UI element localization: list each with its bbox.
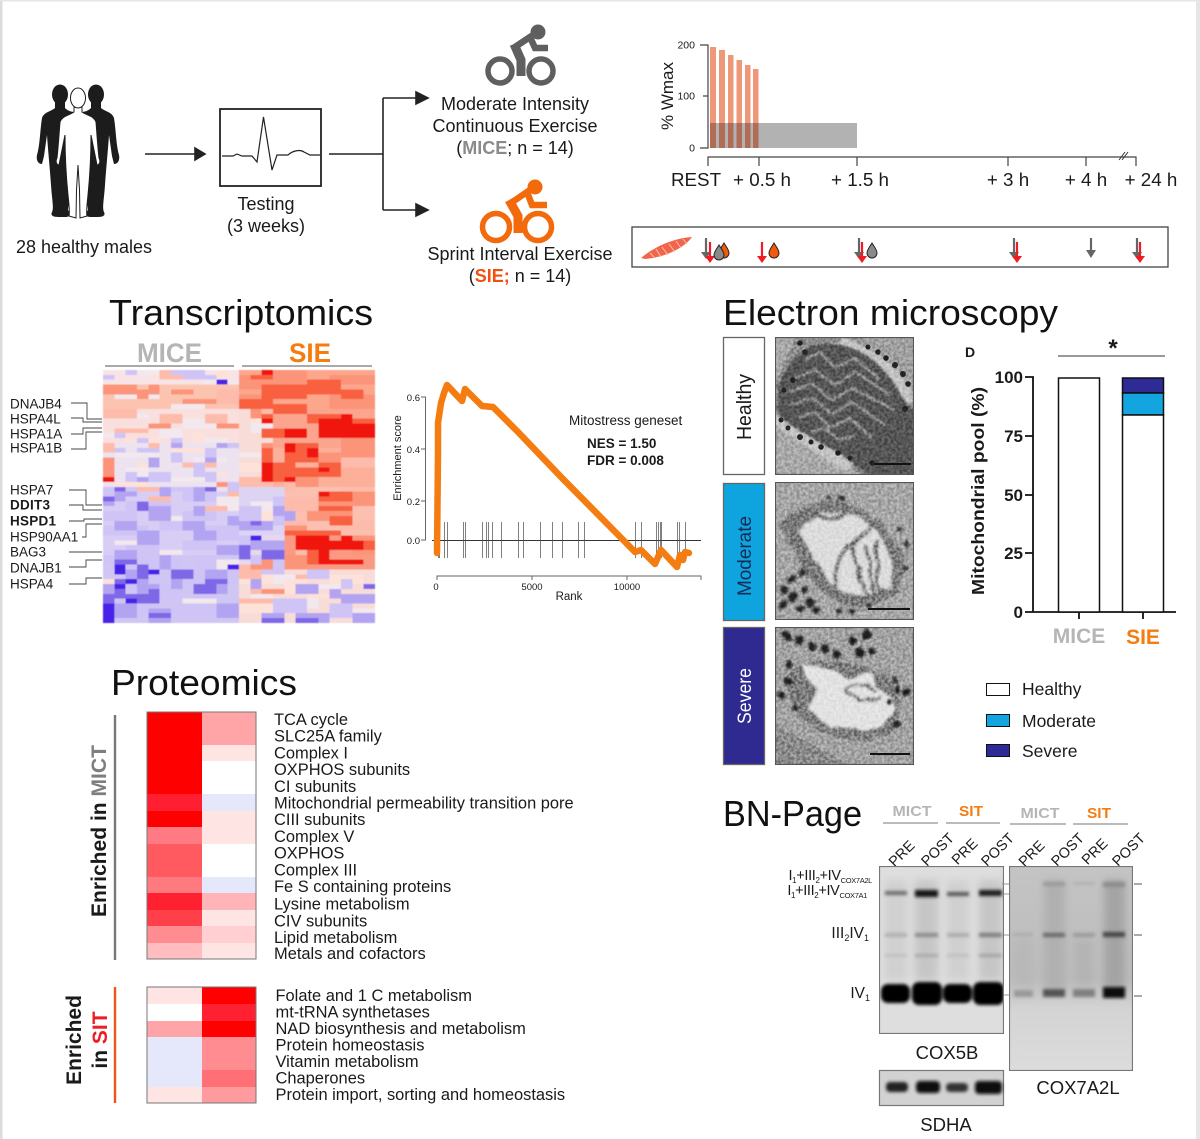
time axis: [708, 152, 1136, 166]
complex labels: III: [831, 925, 844, 942]
pathway labels: Lipid metabolism: [274, 929, 397, 947]
x labels: [1053, 625, 1160, 649]
pathway labels: CIII subunits: [274, 811, 365, 829]
labels: gene names: HSPA1B: [10, 440, 62, 456]
complex labels: 1: [791, 891, 796, 900]
pathway labels: Complex V: [274, 828, 354, 846]
icon: healthy male silhouettes: [37, 84, 119, 218]
pathway labels: Chaperones: [276, 1070, 365, 1088]
heatmap: [147, 987, 256, 1103]
side label: Enriched: [63, 995, 86, 1085]
x axis: Rank: [556, 591, 583, 603]
y axis title: % Wmax: [658, 62, 677, 130]
y axis title: Mitochondrial pool (%): [968, 387, 988, 595]
labels: gene names: [10, 396, 78, 592]
y axis: 0: [1014, 603, 1023, 622]
pathway labels: Complex I: [274, 744, 348, 762]
icon: grey cyclist: [488, 24, 553, 83]
complex labels: I: [788, 868, 792, 884]
significance bracket: *: [1108, 335, 1118, 362]
time labels: REST: [671, 169, 722, 190]
pathway labels: Fe S containing proteins: [274, 878, 451, 896]
panel: study design: [16, 24, 613, 286]
text: SIE description: (SIE; n = 14): [469, 266, 571, 286]
image: severe damage mitochondrion: [775, 627, 914, 765]
icon: orange cyclist: [482, 180, 552, 240]
pathway labels: CI subunits: [274, 778, 356, 796]
panel: BN-Page blots: [787, 803, 1149, 1135]
text: 28 healthy males: 28 healthy males: [16, 237, 152, 257]
lane labels: [886, 830, 1149, 870]
y axis: 75: [1004, 427, 1023, 446]
time labels: + 1.5 h: [831, 169, 889, 190]
lane labels: POST: [1049, 830, 1088, 870]
legend: [986, 679, 1096, 761]
y axis: 0: [689, 142, 695, 154]
pathway labels: mt-tRNA synthetases: [276, 1004, 430, 1022]
panel: proteomics enriched in MICT: [88, 711, 574, 963]
pathway labels: SLC25A family: [274, 728, 383, 746]
legend: Moderate: [1022, 711, 1096, 731]
label: Healthy: Healthy: [734, 374, 756, 440]
image: healthy mitochondrion: [775, 337, 914, 475]
enrichment curve: [437, 385, 689, 567]
y axis: 100: [677, 90, 695, 102]
complex labels: COX7A1: [840, 891, 867, 900]
lane labels: PRE: [949, 836, 982, 868]
side label: Enriched in MICT: [88, 745, 111, 917]
lane labels: PRE: [1016, 838, 1049, 870]
blot names: COX7A2L: [1036, 1077, 1120, 1098]
text: MICE description: [432, 94, 598, 158]
marker ticks right: [1134, 884, 1142, 996]
zero line and rug ticks: [432, 522, 701, 558]
blot names: COX5B: [916, 1042, 978, 1063]
pathway labels: Complex III: [274, 861, 357, 879]
side label: [63, 987, 115, 1103]
chart: exercise protocol timeline: [658, 40, 1177, 190]
text: MICE description: (MICE; n = 14): [456, 138, 574, 158]
heading: Transcriptomics: Transcriptomics: [109, 292, 373, 333]
complex labels: IV: [850, 985, 865, 1002]
chart: transcriptomics heatmap: [103, 370, 375, 623]
chart: GSEA enrichment plot: [392, 385, 701, 603]
x axis: [433, 576, 701, 603]
stats text: FDR = 0.008: [587, 453, 664, 468]
labels: gene names: HSPA7: [10, 482, 53, 498]
moderate continuous block: [710, 123, 857, 148]
group labels: MICT: [1020, 805, 1060, 822]
x labels: MICE: [1053, 625, 1105, 648]
labels: gene names: HSPA4: [10, 576, 54, 592]
text: SIE description: Sprint Interval Exercise: [427, 244, 613, 264]
lane labels: PRE: [886, 838, 919, 870]
x axis: 10000: [614, 582, 640, 593]
marker ticks: [1002, 884, 1009, 995]
pathway labels: Mitochondrial permeability transition pore: [274, 794, 574, 812]
lane labels: PRE: [1079, 836, 1112, 868]
complex labels: 1: [864, 933, 869, 943]
complex labels: IV: [849, 925, 865, 942]
label: SIE column group: SIE: [289, 338, 331, 368]
heading: BN-Page: BN-Page: [723, 793, 862, 834]
text: SIE description: [427, 244, 613, 286]
icon: ECG testing box: [220, 109, 321, 186]
y axis: 0.0: [407, 536, 420, 547]
group labels: SIT: [1087, 805, 1111, 822]
heading: Electron microscopy: Electron microscopy: [723, 292, 1058, 333]
SIE bar: [1122, 378, 1164, 612]
complex labels: +IV: [818, 883, 840, 899]
y axis: [995, 368, 1176, 622]
blot: SDHA: [880, 1070, 1004, 1106]
text: testing: Testing: [237, 194, 295, 214]
heatmap: [147, 712, 256, 959]
gene connector lines: [69, 403, 102, 584]
icon: blood drops: [714, 243, 877, 260]
x axis: 5000: [521, 582, 543, 593]
pathway labels: Protein homeostasis: [276, 1036, 424, 1054]
labels: gene names: HSP90AA1: [10, 530, 78, 544]
label: Severe: Severe: [735, 668, 756, 724]
stats text: [569, 413, 683, 468]
y axis: Enrichment score: [392, 415, 404, 501]
complex labels: 1: [865, 993, 870, 1003]
icon: sampling arrows: [701, 238, 1145, 263]
complex labels: +IV: [820, 868, 841, 884]
complex labels: 2: [844, 933, 849, 943]
pathway labels: Metals and cofactors: [274, 945, 426, 963]
label: Moderate: Moderate: [734, 516, 756, 596]
arrow: to testing: [145, 148, 205, 160]
label: Moderate: [724, 484, 764, 620]
pathway labels: CIV subunits: [274, 912, 367, 930]
pathway labels: Folate and 1 C metabolism: [276, 987, 472, 1005]
x labels: SIE: [1126, 626, 1160, 649]
y axis: [392, 393, 426, 547]
y axis: [677, 40, 708, 154]
blot: COX5B: [879, 866, 1004, 1034]
y axis: 0.2: [407, 497, 420, 508]
blot names: [916, 1042, 1120, 1135]
complex labels: COX7A2L: [841, 876, 872, 885]
x axis: 0: [433, 582, 439, 593]
pathway labels: [274, 711, 574, 963]
significance bracket: [1058, 335, 1165, 362]
labels: gene names: HSPA4L: [10, 412, 61, 426]
time labels: + 4 h: [1065, 169, 1107, 190]
complex labels: 2: [815, 876, 820, 885]
legend: Healthy: [1022, 679, 1082, 699]
group labels: SIT: [959, 803, 983, 820]
complex labels: 2: [814, 891, 819, 900]
labels: gene names: DNAJB4: [10, 396, 62, 412]
lane labels: POST: [1110, 830, 1149, 870]
y axis: 0.4: [407, 445, 420, 456]
complex labels: +III: [795, 883, 814, 899]
pathway labels: [276, 987, 565, 1104]
lane labels: POST: [919, 830, 958, 870]
complex labels: I: [787, 883, 791, 899]
y axis: 200: [677, 40, 695, 52]
pathway labels: Protein import, sorting and homeostasis: [276, 1086, 565, 1104]
labels: gene names: DDIT3: [10, 498, 50, 512]
stats text: NES = 1.50: [587, 436, 656, 451]
legend: Severe: [1022, 741, 1077, 761]
pathway labels: Vitamin metabolism: [276, 1053, 419, 1071]
label: Severe: [724, 628, 764, 764]
blot: COX7A2L: [1009, 866, 1133, 1071]
sprint bars: [710, 47, 758, 148]
icon: muscle fibre: [641, 237, 692, 259]
panel: sampling timeline box: [632, 227, 1168, 267]
group labels: [883, 803, 1128, 824]
arrow: branching to exercise groups: [329, 92, 428, 216]
text: 3 weeks: (3 weeks): [227, 216, 305, 236]
labels: gene names: HSPD1: [10, 514, 56, 528]
complex labels: 1: [792, 876, 797, 885]
time labels: + 3 h: [987, 169, 1029, 190]
pathway labels: Lysine metabolism: [274, 896, 410, 914]
pathway labels: TCA cycle: [274, 711, 348, 729]
panel: proteomics enriched in SIT: [63, 987, 565, 1104]
text: MICE description: Moderate Intensity: [441, 94, 589, 114]
panel letter: D: [965, 344, 975, 360]
blot names: SDHA: [920, 1114, 972, 1135]
label: SIE column group: [242, 338, 372, 368]
y axis: 50: [1004, 486, 1023, 505]
stats text: Mitostress geneset: [569, 413, 683, 428]
lane labels: POST: [979, 830, 1018, 870]
chart: mitochondrial pool stacked bars: [965, 335, 1176, 761]
labels: gene names: DNAJB1: [10, 560, 62, 576]
y axis: 100: [995, 368, 1023, 387]
time labels: [671, 169, 1177, 190]
time labels: + 24 h: [1125, 169, 1177, 190]
pathway labels: OXPHOS: [274, 845, 344, 863]
side label: in SIT: [89, 1011, 112, 1069]
y axis: 0.6: [407, 393, 420, 404]
labels: gene names: BAG3: [10, 544, 46, 560]
label: MICE column group: MICE: [137, 338, 202, 368]
image: moderate damage mitochondrion: [775, 482, 914, 620]
complex labels: +III: [796, 868, 815, 884]
pathway labels: NAD biosynthesis and metabolism: [276, 1020, 526, 1038]
complex labels: [787, 868, 872, 1003]
labels: gene names: HSPA1A: [10, 426, 62, 442]
text: MICE description: Continuous Exercise: [432, 116, 598, 136]
label: MICE column group: [105, 338, 234, 368]
MICE bar: [1058, 378, 1100, 612]
group labels: MICT: [892, 803, 932, 820]
pathway labels: OXPHOS subunits: [274, 761, 410, 779]
time labels: + 0.5 h: [733, 169, 791, 190]
y axis: 25: [1004, 544, 1023, 563]
heading: Proteomics: Proteomics: [111, 662, 297, 703]
label: Healthy: [724, 338, 764, 474]
